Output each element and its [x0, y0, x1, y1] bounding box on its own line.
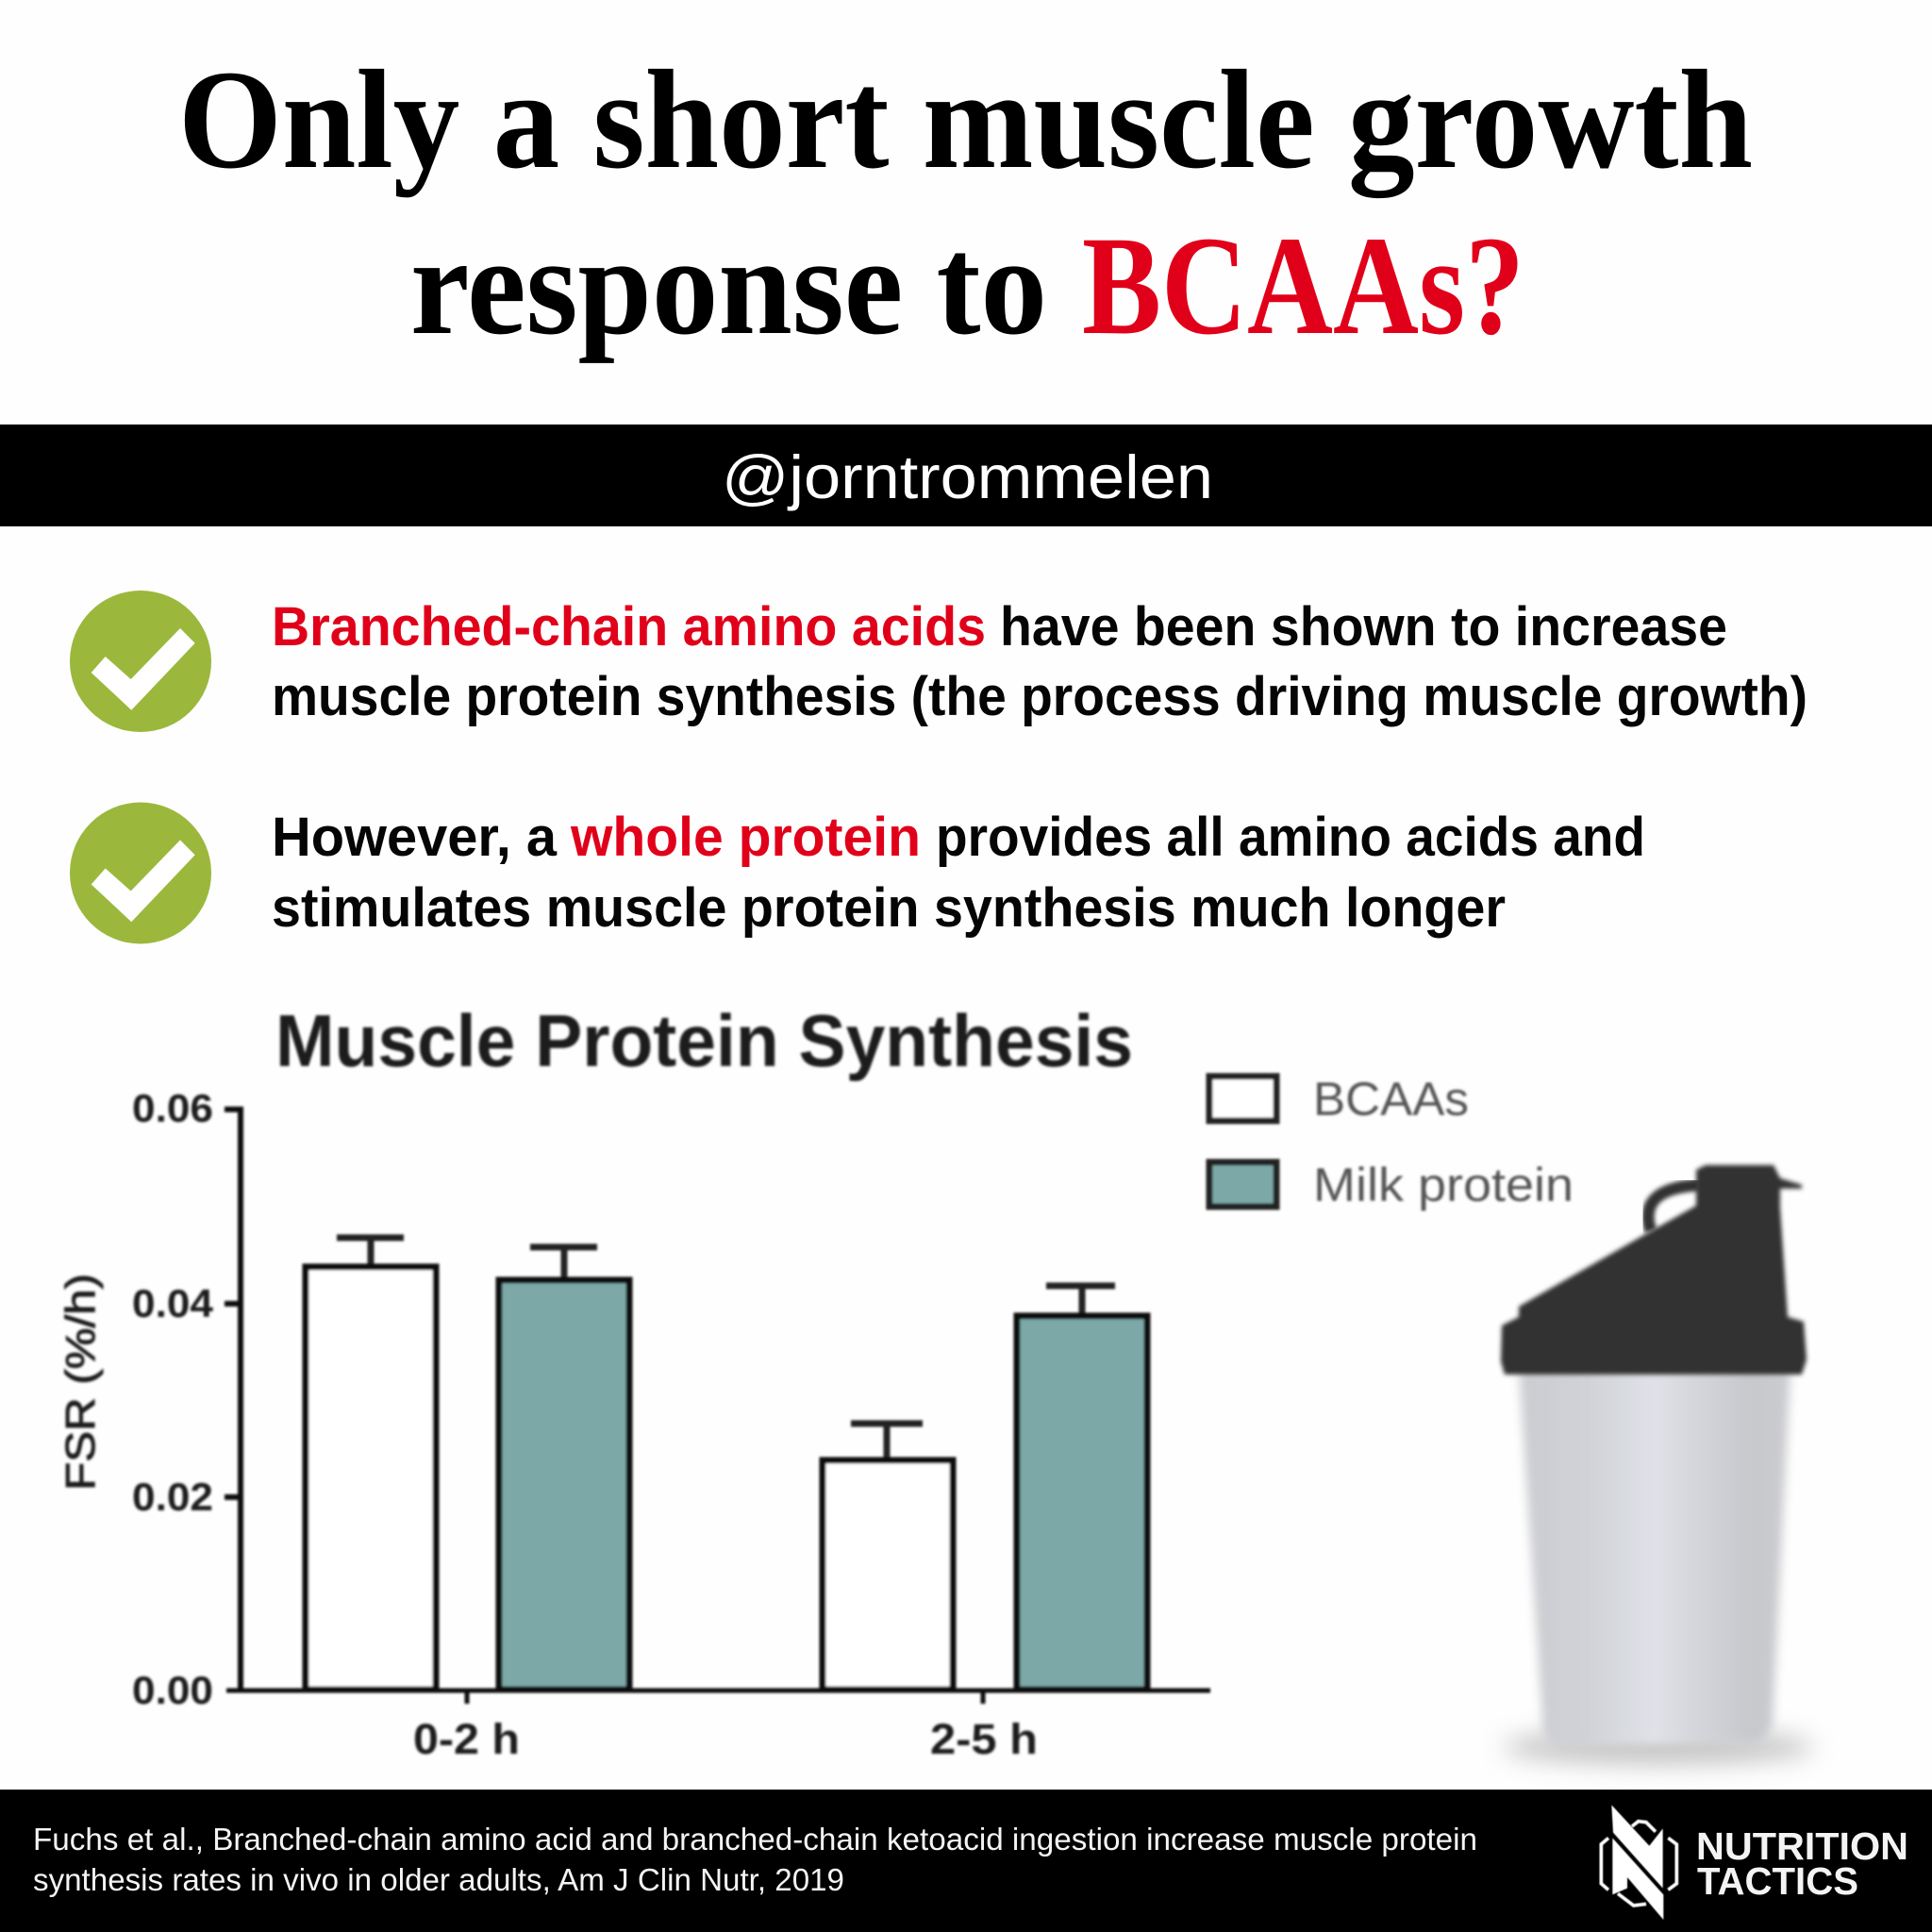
- logo: nutrition tactics: [1601, 1805, 1908, 1920]
- text block: whole protein: [272, 807, 1645, 939]
- citation: Fuchs et al., Branched-chain amino acid and branched-chain ketoacid ingestion increase muscle protein: [33, 1822, 1477, 1857]
- y axis: 0.00: [132, 1668, 213, 1712]
- icon: check mark 1: [70, 591, 211, 732]
- text block: whole protein: However, a: [272, 807, 558, 868]
- citation: [33, 1822, 1477, 1897]
- text block: branched-chain amino acids: Branched-chain amino acids: [272, 596, 986, 658]
- y axis: 0.04: [132, 1281, 214, 1325]
- bar: Milk protein 0-2 h: [499, 1247, 629, 1690]
- legend: [1209, 1073, 1574, 1211]
- x axis: [226, 1690, 1210, 1763]
- x axis: 2-5 h: [930, 1715, 1038, 1763]
- legend: BCAAs: [1313, 1073, 1469, 1125]
- text block: branched-chain amino acids: have been shown to increase: [1000, 596, 1727, 658]
- icon: protein shaker bottle: [1501, 1165, 1814, 1764]
- logo: nutrition tactics: NUTRITION: [1696, 1824, 1908, 1868]
- handle banner: @jorntrommelen: [722, 442, 1213, 511]
- chart title: Muscle Protein Synthesis: [275, 999, 1133, 1082]
- icon: check mark 2: [70, 802, 211, 943]
- text block: whole protein: provides all amino acids and: [936, 807, 1645, 868]
- logo: nutrition tactics: TACTICS: [1697, 1859, 1858, 1903]
- bar: BCAAs 2-5 h: [823, 1424, 953, 1690]
- text block: branched-chain amino acids: [272, 596, 1807, 727]
- x axis: 0-2 h: [413, 1715, 520, 1763]
- handle banner: [0, 425, 1932, 526]
- footer bar: [0, 1790, 1932, 1932]
- bar: BCAAs 0-2 h: [306, 1238, 436, 1690]
- citation: synthesis rates in vivo in older adults, Am J Clin Nutr, 2019: [33, 1862, 844, 1897]
- title: Only a short muscle growth: [178, 42, 1753, 198]
- y axis: [132, 1086, 242, 1712]
- title: [178, 42, 1753, 364]
- bar: Milk protein 2-5 h: [1017, 1286, 1147, 1690]
- y axis label: FSR (%/h): [58, 1274, 104, 1491]
- title: BCAAs?: [1082, 208, 1524, 364]
- y axis: 0.06: [132, 1086, 213, 1130]
- text block: branched-chain amino acids: muscle protein synthesis (the process driving muscle growth): [272, 666, 1807, 727]
- y axis: 0.02: [132, 1474, 213, 1519]
- text block: whole protein: stimulates muscle protein synthesis much longer: [272, 877, 1506, 939]
- legend: Milk protein: [1313, 1158, 1574, 1211]
- text block: whole protein: whole protein: [570, 807, 921, 868]
- title: response to: [410, 208, 1047, 364]
- bar chart: muscle protein synthesis: [58, 999, 1574, 1763]
